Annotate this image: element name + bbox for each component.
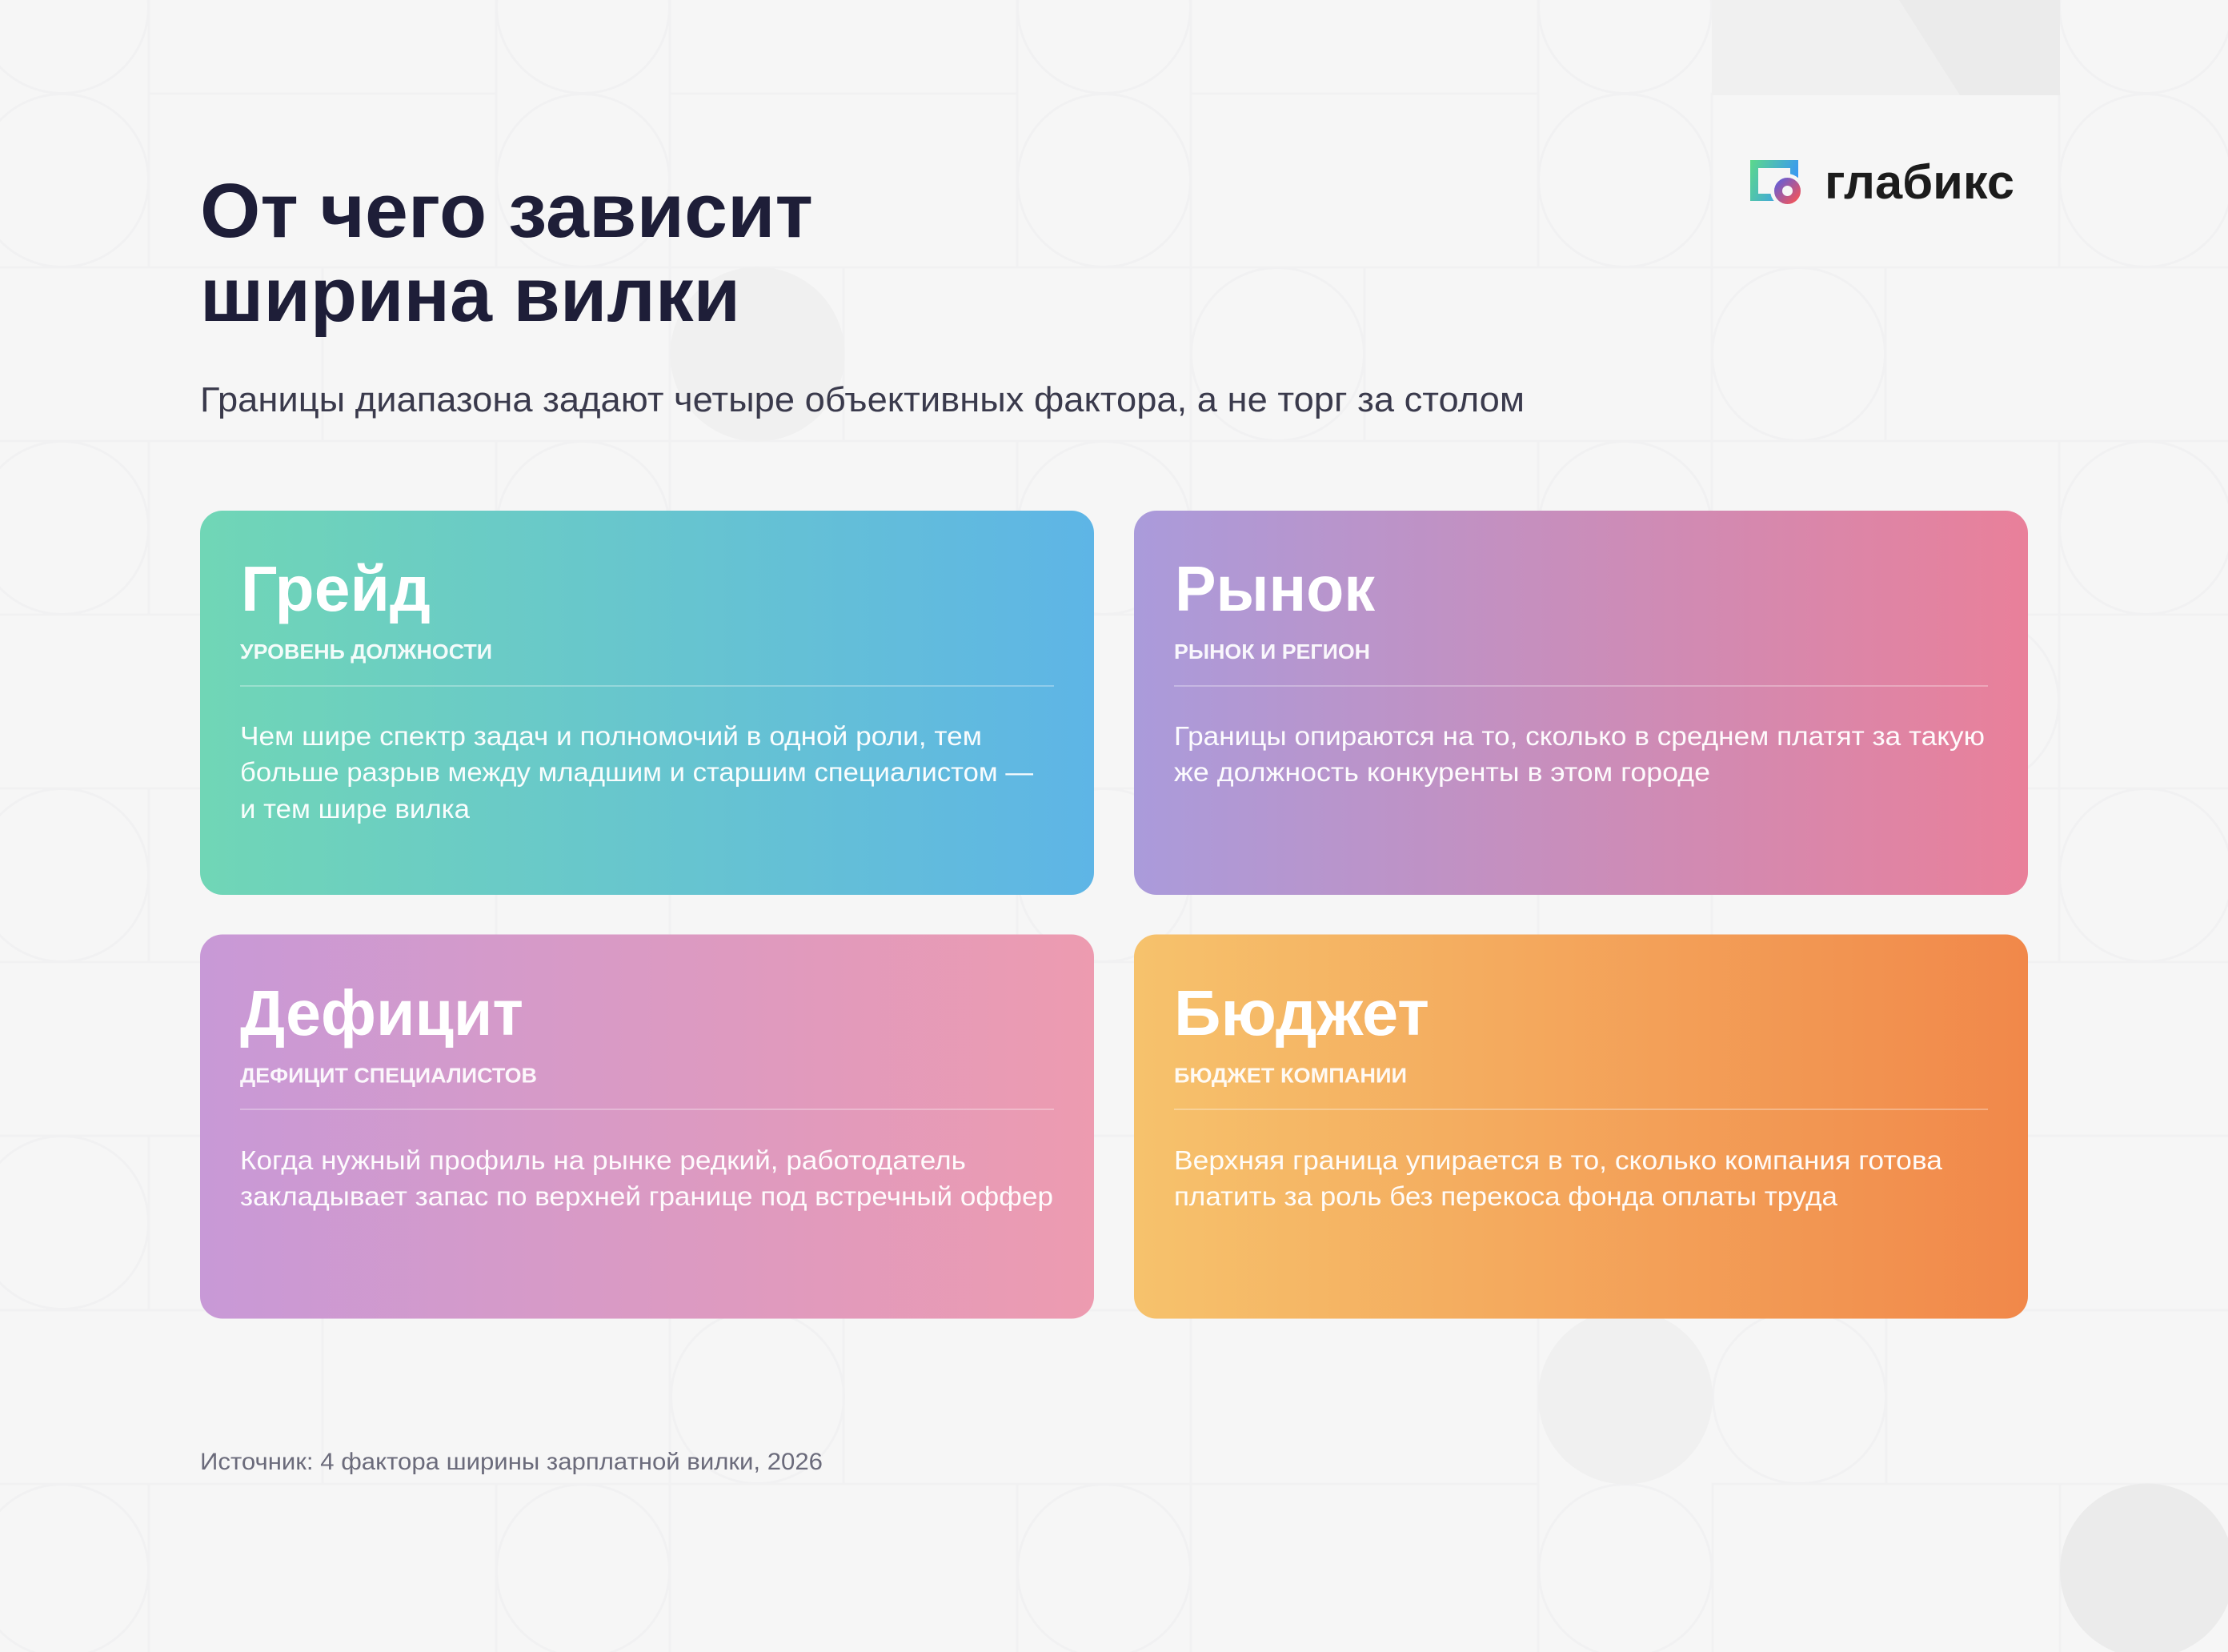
- body text: Бюджет: Верхняя граница упирается в то, сколько компания готова: [1174, 1145, 1943, 1175]
- panel: Грейд: [200, 511, 1094, 895]
- label: уровень должности: УРОВЕНЬ ДОЛЖНОСТИ: [240, 640, 492, 664]
- title: ширина вилки: [200, 252, 740, 338]
- body text: Рынок: [1174, 721, 1985, 787]
- heading: Дефицит: Дефицит: [240, 977, 523, 1049]
- body text: Рынок: Границы опираются на то, сколько в среднем платят за такую: [1174, 721, 1985, 751]
- panel: Бюджет: [1134, 935, 2028, 1319]
- body text: Рынок: же должность конкуренты в этом городе: [1174, 757, 1710, 787]
- heading: Рынок: Рынок: [1175, 553, 1376, 624]
- panel: Рынок: [1134, 511, 2028, 895]
- label: рынок и регион: РЫНОК И РЕГИОН: [1174, 640, 1370, 664]
- body text: Дефицит: [240, 1145, 1053, 1211]
- body text: Бюджет: платить за роль без перекоса фонда оплаты труда: [1174, 1181, 1838, 1211]
- heading: Бюджет: Бюджет: [1174, 977, 1429, 1049]
- label: дефицит специалистов: ДЕФИЦИТ СПЕЦИАЛИСТОВ: [240, 1063, 537, 1087]
- body text: Дефицит: Когда нужный профиль на рынке редкий, работодатель: [240, 1145, 966, 1175]
- logo wordmark: глабикс: [1825, 155, 2014, 209]
- source note: Источник: 4 фактора ширины зарплатной вилки, 2026: [200, 1449, 823, 1475]
- logo: [1750, 155, 2014, 209]
- title: От чего зависит: [200, 168, 813, 254]
- subtitle: Границы диапазона задают четыре объективных фактора, а не торг за столом: [200, 380, 1525, 419]
- body text: Грейд: больше разрыв между младшим и старшим специалистом —: [240, 757, 1033, 787]
- body text: Грейд: Чем шире спектр задач и полномочий в одной роли, тем: [240, 721, 982, 751]
- body text: Бюджет: [1174, 1145, 1943, 1211]
- label: бюджет компании: БЮДЖЕТ КОМПАНИИ: [1174, 1063, 1407, 1087]
- body text: Дефицит: закладывает запас по верхней границе под встречный оффер: [240, 1181, 1053, 1211]
- body text: Грейд: [240, 721, 1033, 824]
- heading: Грейд: Грейд: [241, 553, 431, 624]
- panel: Дефицит: [200, 935, 1094, 1319]
- body text: Грейд: и тем шире вилка: [240, 794, 471, 824]
- title: [200, 168, 813, 338]
- icon: logo mark: [1750, 160, 1804, 207]
